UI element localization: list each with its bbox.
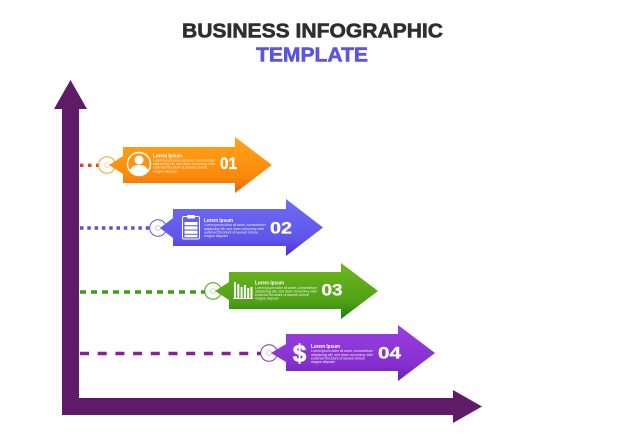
text 03: Lorem ipsum dolor sit amet, consectetuer (255, 286, 318, 290)
dashed connector 4 (80, 352, 261, 355)
text 02: Lorem ipsum dolor sit amet, consectetuer (204, 223, 267, 227)
arrow 01 (109, 137, 272, 193)
text 03: Lorem Ipsum (255, 280, 285, 286)
axes arrow (54, 80, 482, 423)
text 01: euismod tincidunt ut laoreet dolore (153, 166, 207, 170)
number 02: 02 (270, 220, 292, 238)
text 02: adipiscing elit, sed diam nonummy nibh (204, 227, 264, 231)
text 02: Lorem Ipsum (204, 218, 234, 224)
text 04: euismod tincidunt ut laoreet dolore (311, 356, 365, 360)
number 01: 01 (220, 155, 237, 173)
dotted connector 1 (80, 164, 99, 167)
arrow 03 (215, 263, 378, 319)
title: TEMPLATE (256, 44, 368, 66)
text 01: Lorem Ipsum (153, 154, 183, 160)
text 02 (204, 218, 267, 238)
text 04: magna aliquam (311, 360, 335, 364)
icon: person (128, 152, 150, 176)
step 04 (261, 325, 435, 381)
text 01: magna aliquam (153, 169, 177, 173)
dotted connector 2 (80, 226, 150, 230)
number 04: 04 (378, 344, 402, 362)
text 01 (153, 154, 216, 173)
step 01 (99, 137, 272, 193)
title (182, 20, 443, 66)
text 02: magna aliquam (204, 234, 228, 238)
text 01: adipiscing elit, sed diam nonummy nibh (153, 162, 215, 166)
arrow 02 (160, 199, 323, 256)
icon: dollar sign: $ (293, 340, 307, 368)
text 04: adipiscing elit, sed diam nonummy nibh (311, 353, 373, 357)
text 01: Lorem ipsum dolor sit amet, consectetuer (153, 158, 216, 162)
text 04: Lorem Ipsum (311, 344, 341, 350)
icon: clipboard (182, 215, 200, 239)
arrow 04 (271, 325, 435, 381)
step 02 (150, 199, 323, 256)
text 04: Lorem ipsum dolor sit amet, consectetuer (311, 349, 374, 353)
text 03: adipiscing elit, sed diam nonummy nibh (255, 289, 317, 293)
text 03: magna aliquam (255, 297, 279, 301)
text 03 (255, 280, 318, 301)
text 03: euismod tincidunt ut laoreet dolore (255, 293, 309, 297)
text 02: euismod tincidunt ut laoreet dolore (204, 230, 258, 234)
number 03: 03 (322, 282, 342, 300)
step 03 (205, 263, 378, 319)
text 04 (311, 344, 374, 364)
icon: bar chart (233, 282, 253, 299)
dashed connector 3 (80, 290, 205, 294)
title: BUSINESS INFOGRAPHIC (182, 20, 443, 42)
